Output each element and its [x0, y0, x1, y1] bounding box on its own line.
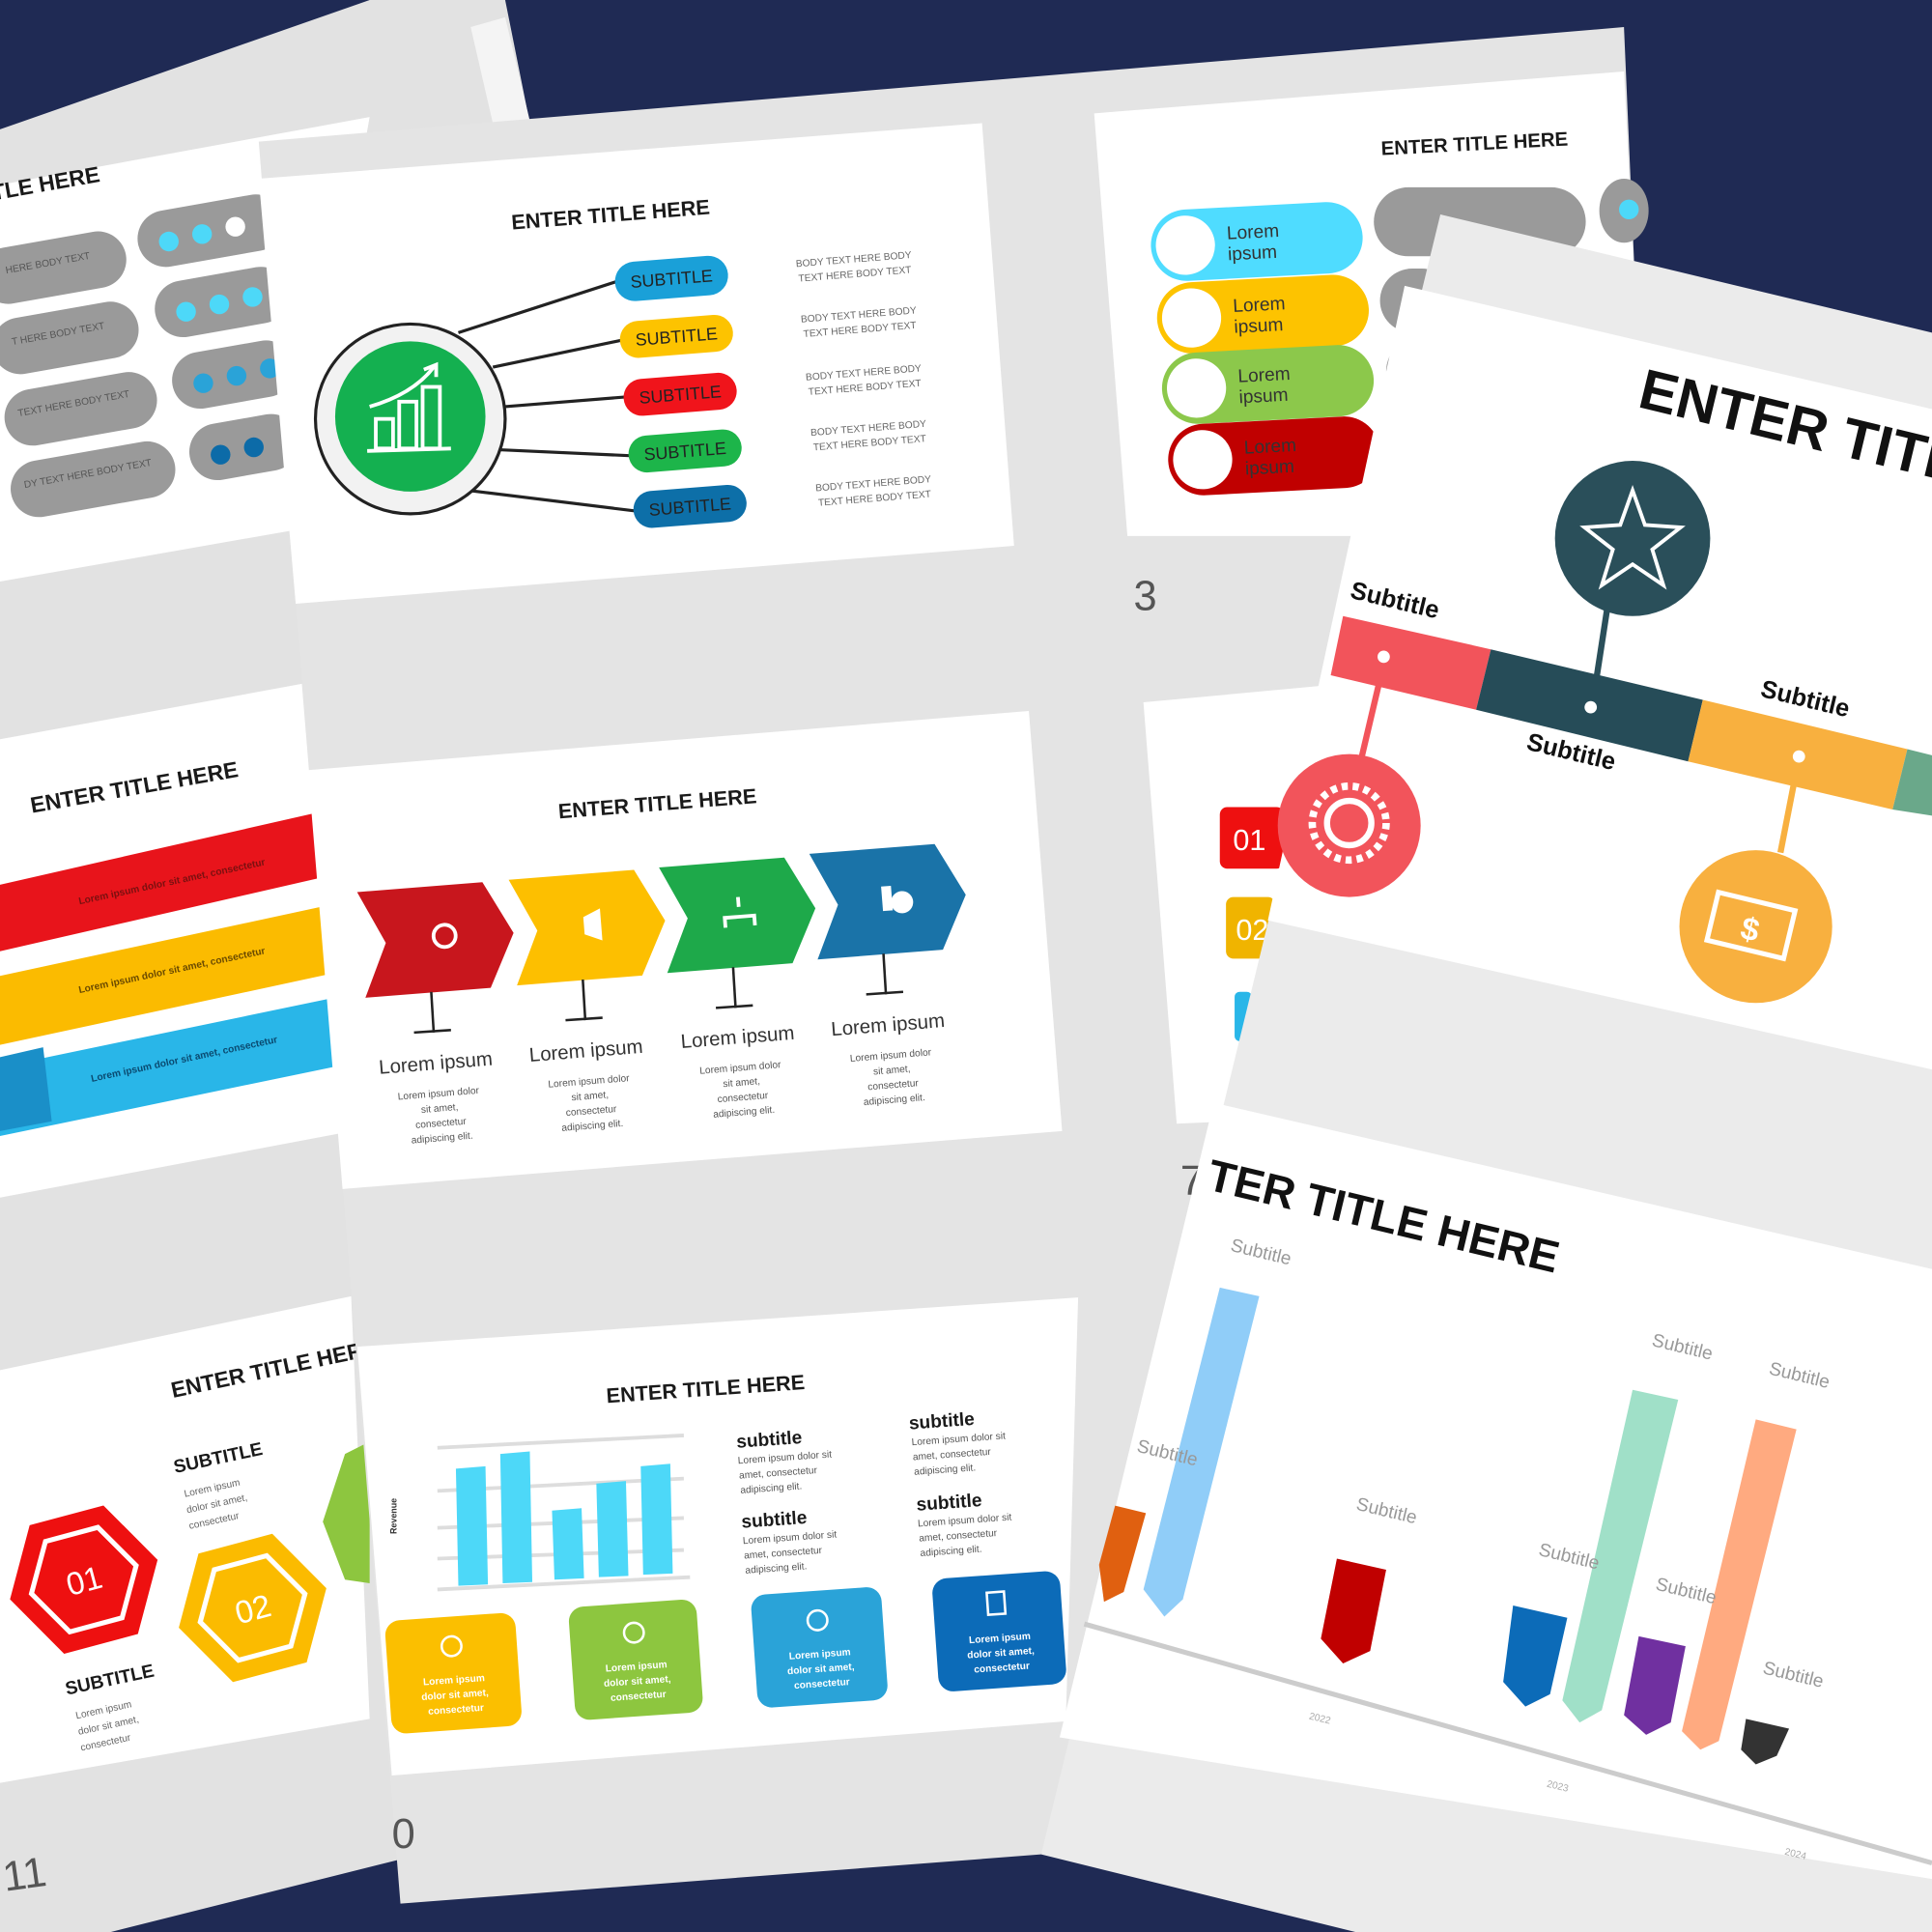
stage body texts: adipiscing elit.	[863, 1093, 925, 1108]
hex body texts	[74, 1478, 248, 1753]
axis labels: 2022	[1308, 1712, 1332, 1727]
dots	[159, 216, 280, 465]
stage body texts: Lorem ipsum dolor	[548, 1073, 631, 1091]
bar labels: Subtitle	[1654, 1575, 1719, 1608]
bar labels: Subtitle	[1229, 1236, 1293, 1269]
subtitle blocks slide 10	[736, 1409, 1012, 1577]
hex body texts: Lorem ipsum	[74, 1699, 132, 1721]
body texts slide 2: TEXT HERE BODY TEXT	[818, 490, 931, 509]
subtitle blocks slide 10: amet, consectetur	[744, 1546, 823, 1562]
hub circle	[316, 324, 505, 514]
slide 7 partial	[1144, 684, 1343, 1123]
back paper strip	[470, 17, 529, 124]
subtitle blocks slide 10: subtitle	[736, 1428, 803, 1453]
hex body texts: consectetur	[80, 1733, 132, 1753]
stage body texts: sit amet,	[873, 1064, 911, 1077]
bar labels: Subtitle	[1650, 1330, 1715, 1365]
colored boxes slide 10: consectetur	[428, 1703, 484, 1718]
pill texts	[5, 251, 153, 491]
colored pills slide 3: Lorem	[1233, 294, 1286, 317]
colored boxes slide 10: consectetur	[974, 1661, 1030, 1675]
stage body texts: consectetur	[565, 1104, 617, 1119]
slide number 10 partial: 0	[392, 1811, 415, 1858]
colored boxes slide 10	[384, 1571, 1067, 1734]
hex body texts: consectetur	[188, 1511, 241, 1532]
subtitle blocks slide 10: subtitle	[916, 1491, 982, 1516]
title left slide 5: ENTER TITLE HERE	[28, 756, 240, 818]
stage body texts: adipiscing elit.	[411, 1131, 473, 1147]
gray text pills	[0, 190, 304, 522]
stage labels: Lorem ipsum	[831, 1010, 946, 1040]
colored boxes slide 10: Lorem ipsum	[605, 1660, 668, 1675]
subtitle blocks slide 10: amet, consectetur	[919, 1528, 998, 1545]
red band	[0, 813, 323, 952]
hexagon 02	[161, 1524, 344, 1692]
stage body texts: Lorem ipsum dolor	[699, 1060, 781, 1077]
subtitle blocks slide 10: adipiscing elit.	[740, 1481, 803, 1496]
stage body texts: sit amet,	[723, 1076, 760, 1090]
subtitle labels: Subtitle	[1348, 577, 1442, 624]
hexagon 01	[0, 1495, 175, 1663]
gear circle	[1278, 754, 1421, 897]
colored boxes slide 10: dolor sit amet,	[604, 1674, 671, 1690]
hex body texts: Lorem ipsum	[184, 1478, 242, 1500]
body texts slide 2: BODY TEXT HERE BODY	[795, 250, 912, 270]
colored pills slide 3: Lorem	[1226, 221, 1280, 244]
colored boxes slide 10: consectetur	[611, 1690, 667, 1704]
pill texts: T HERE BODY TEXT	[11, 321, 105, 348]
slide 3	[1094, 71, 1649, 536]
badge 03	[1235, 992, 1252, 1041]
pills slide 2: SUBTITLE	[639, 382, 722, 408]
band texts	[78, 858, 278, 1085]
stage body texts: consectetur	[717, 1091, 769, 1105]
colored boxes slide 10: Lorem ipsum	[788, 1647, 851, 1662]
stage body texts: adipiscing elit.	[561, 1119, 624, 1134]
cyan band	[0, 998, 339, 1136]
body texts slide 2: BODY TEXT HERE BODY	[806, 363, 922, 384]
pill texts: HERE BODY TEXT	[5, 251, 91, 276]
bar labels: Subtitle	[1761, 1659, 1826, 1692]
stage body texts: consectetur	[415, 1117, 468, 1131]
connectors	[1361, 604, 1799, 853]
colored pills slide 3: ipsum	[1234, 315, 1284, 338]
stage labels: Lorem ipsum	[528, 1037, 643, 1066]
stage body texts: sit amet,	[421, 1102, 459, 1116]
body texts slide 2: BODY TEXT HERE BODY	[801, 305, 917, 326]
hexagon 02: 02	[231, 1588, 275, 1632]
subtitle blocks slide 10: Lorem ipsum dolor sit	[911, 1431, 1006, 1448]
subtitle blocks slide 10: Lorem ipsum dolor sit	[918, 1513, 1012, 1529]
bar labels: Subtitle	[1767, 1359, 1832, 1393]
bar chart: Revenue	[389, 1498, 399, 1534]
stage body texts: Lorem ipsum dolor	[397, 1086, 480, 1103]
left back sheet	[0, 0, 529, 1932]
stage labels	[378, 1010, 946, 1079]
colored pills slide 3	[1150, 200, 1381, 497]
stage body texts: consectetur	[867, 1078, 920, 1093]
badge 02	[1226, 897, 1275, 958]
stage labels: Lorem ipsum	[680, 1023, 795, 1053]
dollar circle	[1680, 850, 1833, 1003]
timeline band	[1331, 616, 1932, 815]
slide number 7: 7	[1180, 1158, 1204, 1205]
title slide 10: ENTER TITLE HERE	[606, 1370, 806, 1407]
subtitle labels	[1348, 577, 1852, 776]
hex body texts: dolor sit amet,	[77, 1715, 140, 1738]
bar labels: Subtitle	[1537, 1540, 1602, 1574]
slide 6	[308, 711, 1062, 1189]
pills slide 2	[613, 254, 748, 529]
star circle	[1555, 461, 1710, 616]
timeline axis	[1084, 1624, 1932, 1863]
stage labels: Lorem ipsum	[378, 1049, 494, 1079]
title bar timeline: TER TITLE HERE	[1203, 1150, 1564, 1283]
left slide 5	[0, 684, 339, 1198]
bar labels	[1135, 1236, 1832, 1692]
hexagon 01: 01	[63, 1560, 106, 1604]
stems	[414, 953, 903, 1033]
pills slide 2: SUBTITLE	[630, 266, 714, 292]
stage body texts: adipiscing elit.	[713, 1105, 776, 1121]
timeline bars	[1099, 1288, 1797, 1765]
stage body texts: sit amet,	[571, 1090, 609, 1103]
title left slide 9: ENTER TITLE HER	[169, 1337, 366, 1403]
body texts slide 2	[795, 250, 932, 509]
subtitle labels: Subtitle	[1758, 675, 1852, 723]
pills slide 2: SUBTITLE	[648, 494, 732, 520]
colored boxes slide 10: consectetur	[794, 1677, 850, 1691]
band texts: Lorem ipsum dolor sit amet, consectetur	[90, 1035, 278, 1085]
subtitle labels: Subtitle	[1524, 728, 1618, 776]
stage body texts: Lorem ipsum dolor	[850, 1047, 932, 1065]
dollar circle: $	[1737, 911, 1763, 950]
left slide 1	[0, 117, 370, 582]
colored boxes slide 10: dolor sit amet,	[421, 1688, 489, 1703]
pills slide 2: SUBTITLE	[635, 324, 719, 350]
colored pills slide 3: ipsum	[1228, 242, 1278, 265]
cyan tab	[0, 1047, 52, 1131]
slide number 11: 11	[0, 1849, 49, 1901]
colored pills slide 3: ipsum	[1238, 385, 1289, 408]
badge 02: 02	[1236, 914, 1268, 947]
gray pills slide 3	[1374, 179, 1649, 399]
title slide 2: ENTER TITLE HERE	[510, 195, 711, 235]
body texts slide 2: TEXT HERE BODY TEXT	[808, 379, 922, 398]
left slide 9: SUBTITLE	[64, 1661, 156, 1700]
body texts slide 2: TEXT HERE BODY TEXT	[798, 265, 912, 285]
colored boxes slide 10: dolor sit amet,	[967, 1646, 1035, 1662]
body texts slide 2: BODY TEXT HERE BODY	[810, 419, 926, 439]
colored boxes slide 10: dolor sit amet,	[787, 1662, 855, 1677]
pill texts: TEXT HERE BODY TEXT	[17, 389, 130, 419]
hex body texts: dolor sit amet,	[185, 1492, 248, 1516]
badge 01	[1220, 807, 1284, 868]
colored pills slide 3: Lorem	[1237, 364, 1291, 387]
colored pills slide 3: Lorem	[1243, 436, 1297, 459]
axis labels	[1308, 1712, 1807, 1862]
axis labels: 2023	[1546, 1779, 1570, 1795]
center sheet	[259, 27, 1638, 1904]
band texts: Lorem ipsum dolor sit amet, consectetur	[78, 946, 267, 996]
subtitle blocks slide 10: amet, consectetur	[913, 1447, 992, 1463]
left slide 9	[0, 1296, 370, 1783]
subtitle blocks slide 10: subtitle	[908, 1409, 976, 1435]
pill texts: DY TEXT HERE BODY TEXT	[23, 458, 153, 491]
subtitle blocks slide 10: adipiscing elit.	[920, 1545, 982, 1559]
pills slide 2: SUBTITLE	[643, 439, 727, 465]
slide 2	[259, 124, 1014, 604]
subtitle blocks slide 10: subtitle	[741, 1508, 808, 1533]
front slide timeline	[1267, 286, 1932, 1069]
bar labels: Subtitle	[1354, 1494, 1419, 1528]
yellow band	[0, 906, 332, 1045]
band texts: Lorem ipsum dolor sit amet, consectetur	[78, 858, 267, 907]
slide 10	[357, 1297, 1078, 1776]
title slide 6: ENTER TITLE HERE	[557, 783, 757, 823]
body texts slide 2: BODY TEXT HERE BODY	[815, 474, 932, 495]
badge 01: 01	[1233, 824, 1265, 857]
subtitle blocks slide 10: amet, consectetur	[739, 1465, 818, 1482]
bar labels: Subtitle	[1135, 1436, 1200, 1470]
hexagon 03 partial	[323, 1441, 370, 1583]
subtitle blocks slide 10: Lorem ipsum dolor sit	[737, 1450, 833, 1466]
colored boxes slide 10: Lorem ipsum	[969, 1632, 1031, 1646]
icon: growth chart	[367, 365, 451, 451]
bar chart	[389, 1435, 690, 1589]
subtitle blocks slide 10: Lorem ipsum dolor sit	[743, 1529, 838, 1547]
colored boxes slide 10: Lorem ipsum	[423, 1673, 485, 1689]
slide number 3: 3	[1133, 573, 1157, 619]
front slide bar timeline	[1060, 1103, 1932, 1879]
axis labels: 2024	[1783, 1847, 1807, 1862]
body texts slide 2: TEXT HERE BODY TEXT	[803, 321, 917, 340]
stage body texts	[397, 1047, 932, 1147]
subtitle blocks slide 10: adipiscing elit.	[914, 1463, 976, 1478]
colored pills slide 3: ipsum	[1244, 457, 1294, 479]
subtitles: SUBTITLE	[172, 1439, 265, 1478]
chevrons	[357, 842, 970, 998]
front right sheet	[1041, 214, 1932, 1932]
title slide 3: ENTER TITLE HERE	[1380, 129, 1569, 160]
body texts slide 2: TEXT HERE BODY TEXT	[812, 434, 926, 453]
subtitle blocks slide 10: adipiscing elit.	[745, 1561, 808, 1577]
connector lines	[458, 281, 639, 511]
